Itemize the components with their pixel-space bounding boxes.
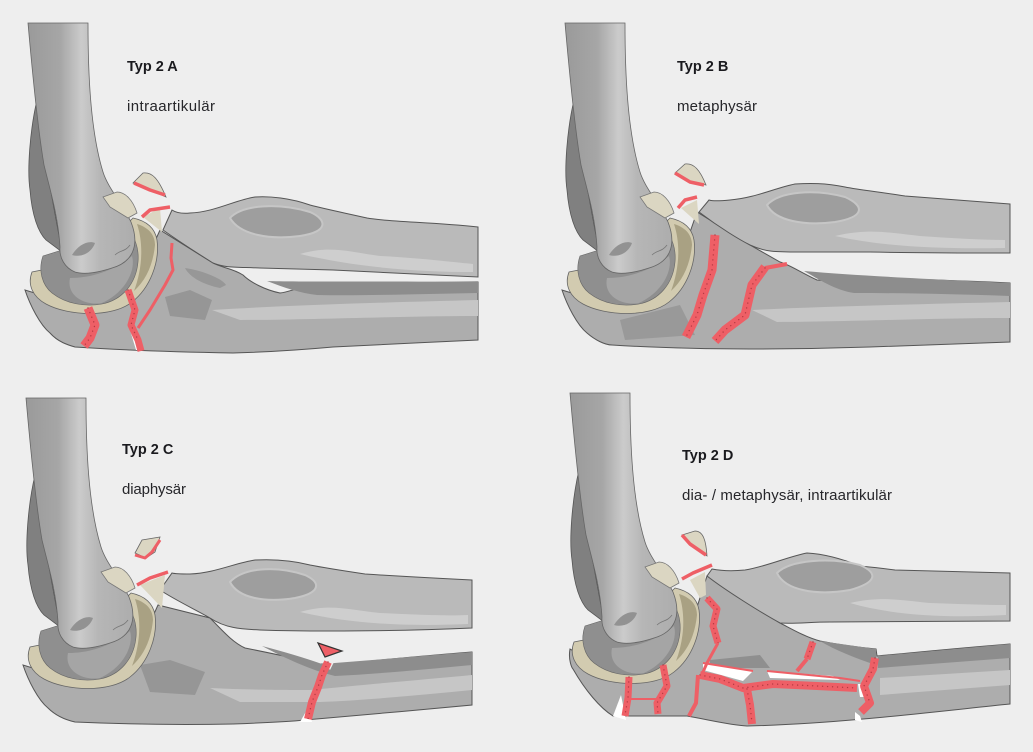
panel: Typ 2A: [25, 23, 478, 353]
label: metaphysär: metaphysär: [677, 98, 757, 115]
fracture lines: [678, 197, 787, 341]
fracture: diaphysis: [300, 654, 338, 722]
olecranon fragment: [133, 173, 166, 197]
fracture lines: [625, 565, 875, 724]
radial tuberosity: [777, 561, 872, 592]
radial neck cream: [690, 572, 706, 598]
bone: radius: [707, 553, 1010, 623]
fracture lines: [84, 207, 173, 351]
label: Typ 2D: Typ 2 D: [682, 448, 733, 464]
humerus and cartilage: [28, 23, 158, 314]
radial head: [681, 200, 699, 224]
label: Typ 2C: Typ 2 C: [122, 442, 174, 458]
humerus and cartilage: [565, 23, 695, 314]
label: intraartikulär: intraartikulär: [127, 98, 215, 115]
fracture: joint: [137, 572, 168, 585]
panel: Typ 2C: [23, 398, 472, 724]
bone: ulna: [562, 212, 1010, 349]
bone: ulna: [23, 605, 472, 724]
label: diaphysär: diaphysär: [122, 481, 186, 498]
bone: radius: [163, 197, 478, 277]
fracture fragment triangle: [318, 643, 342, 657]
label: dia- / metaphysär, intraartikulär: dia- / metaphysär, intraartikulär: [682, 487, 892, 504]
radial tuberosity: [767, 192, 859, 223]
bone: radius: [699, 183, 1010, 253]
radial tuberosity: [230, 206, 322, 237]
olecranon fragment: [135, 537, 160, 558]
humerus and cartilage: [570, 393, 700, 684]
bone: ulna: [25, 230, 478, 353]
olecranon fragment: [682, 531, 707, 556]
radial tuberosity: [230, 569, 316, 600]
bone: radius: [160, 560, 472, 631]
label: Typ 2A: Typ 2 A: [127, 59, 178, 75]
olecranon fragment: [675, 164, 706, 185]
radial head: [143, 208, 162, 232]
white fracture gaps: [613, 663, 865, 722]
humerus and cartilage: [26, 398, 156, 688]
bone: ulna: [569, 576, 1010, 726]
panel: Typ 2B: [562, 23, 1010, 349]
panel: Typ 2D: [569, 393, 1010, 726]
radial head: [140, 575, 165, 608]
label: Typ 2B: Typ 2 B: [677, 59, 728, 75]
